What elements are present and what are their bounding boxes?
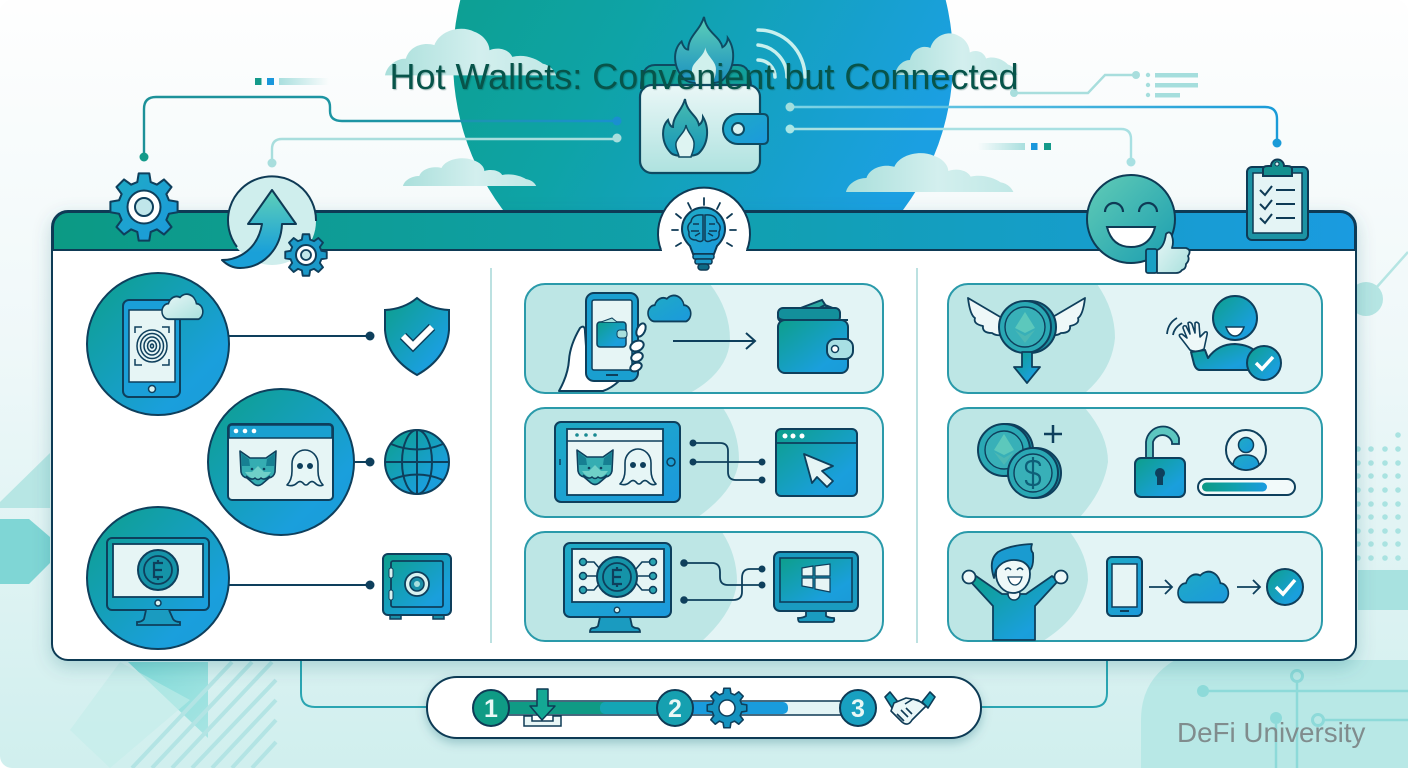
stepper pill [427, 677, 981, 738]
main panel [52, 211, 1356, 660]
decorative marks [255, 73, 1198, 150]
card: easy onboarding [948, 284, 1322, 393]
wallet clasp [723, 114, 768, 144]
connector [229, 335, 370, 337]
step two: 2 [668, 695, 682, 723]
desktop wallet row [87, 507, 451, 649]
icon: large flame [675, 17, 733, 85]
icon: signal arcs [758, 30, 805, 77]
icon: checklist clipboard [1247, 160, 1308, 240]
mobile wallet row [87, 273, 449, 415]
connector [229, 584, 370, 586]
card: simple user flow [948, 532, 1322, 641]
column dividers [491, 268, 917, 643]
icon: safe [383, 554, 451, 619]
progress track [491, 701, 858, 715]
step three [840, 690, 935, 726]
connector [354, 461, 370, 463]
step three: 3 [851, 695, 865, 723]
icon: upgrade arrow with small gear [222, 176, 327, 276]
step one [473, 689, 561, 726]
icon: gear [110, 173, 178, 241]
panel: benefits column [948, 284, 1322, 641]
card: browser extension [525, 408, 883, 517]
central gradient disc [453, 0, 953, 310]
panel: how it works column [525, 284, 883, 641]
panel: wallet types column [87, 273, 451, 649]
brand label: DeFi University [1177, 717, 1365, 748]
browser wallet row [208, 389, 449, 535]
card: mobile app [525, 284, 883, 393]
background clouds [385, 29, 1017, 192]
step one: 1 [484, 695, 498, 723]
connector: panel to stepper [301, 660, 1107, 707]
icon: globe [385, 430, 449, 494]
wallet back flap [641, 65, 751, 88]
icon: smiling face with thumbs up [1087, 175, 1190, 273]
panel header band [53, 212, 1355, 250]
icon: shield [385, 298, 449, 375]
title: Hot Wallets: Convenient but Connected [389, 56, 1018, 97]
step two [657, 688, 747, 728]
card: desktop software [525, 532, 883, 641]
icon: hot wallet with flame and signal [640, 17, 805, 173]
card: manage assets [948, 408, 1322, 517]
wallet body [640, 85, 760, 173]
icon: lightbulb with brain [658, 188, 750, 270]
icon: wallet flame [663, 99, 707, 157]
connector lines [140, 71, 1282, 168]
